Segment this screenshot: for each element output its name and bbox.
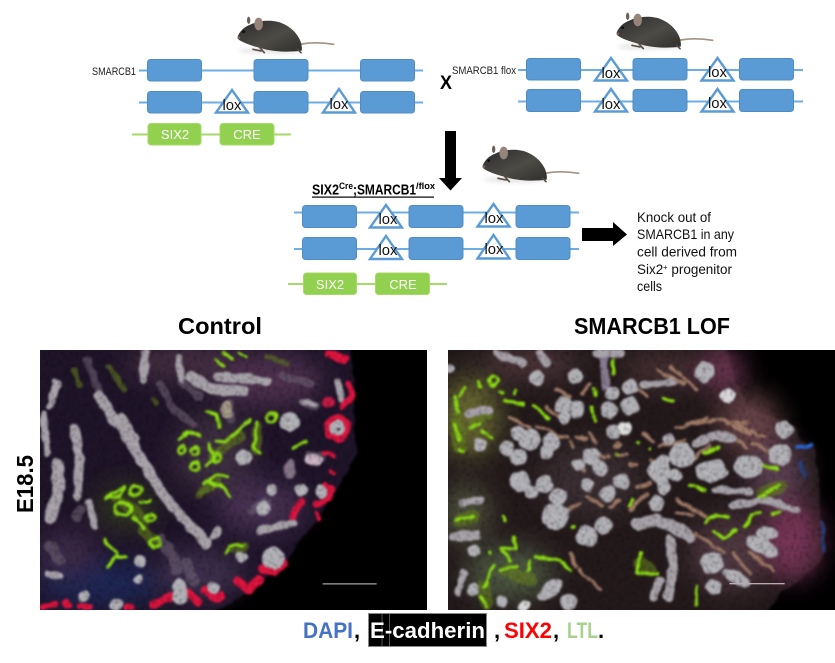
- row label: E18.5: E18.5: [12, 455, 38, 513]
- allele: floxed SMARCB1, right parent top: [518, 58, 803, 82]
- text block: outcome: Knock out of: [637, 209, 711, 225]
- legend: stain colours: LTL: [567, 618, 598, 643]
- scale bar: [323, 583, 377, 585]
- legend: stain colours: [303, 614, 604, 646]
- allele: floxed SMARCB1, left parent: [139, 89, 423, 114]
- allele: floxed SMARCB1, offspring top: [294, 204, 579, 228]
- transgene: SIX2-CRE, left parent: SIX2: [161, 127, 189, 142]
- text block: outcome: progenitor: [668, 261, 732, 277]
- allele: floxed SMARCB1, offspring bottom: lox: [484, 241, 504, 258]
- allele: floxed SMARCB1, offspring top: lox: [378, 211, 398, 228]
- allele: floxed SMARCB1, offspring top: lox: [484, 210, 504, 227]
- allele: floxed SMARCB1, right parent bottom: [518, 89, 803, 113]
- green tubules: [105, 353, 305, 567]
- micrograph: SMARCB1 LOF kidney section: [448, 350, 835, 610]
- legend: stain colours: DAPI: [303, 618, 353, 643]
- cross symbol: X: [440, 73, 452, 94]
- text block: outcome: SMARCB1 in any: [637, 226, 734, 242]
- legend: stain colours: ,: [354, 618, 360, 643]
- mouse: floxed parent: [617, 13, 713, 50]
- allele: floxed SMARCB1, right parent bottom: lox: [708, 95, 727, 112]
- brown tubule fragments: [510, 367, 773, 590]
- arrow: offspring to outcome: [582, 222, 627, 246]
- mouse: offspring: [483, 146, 579, 183]
- transgene: SIX2-CRE, left parent: CRE: [233, 127, 261, 142]
- legend: stain colours: SIX2: [504, 618, 552, 643]
- legend: stain colours: E-cadherin: [370, 618, 485, 643]
- legend: stain colours: .: [598, 618, 604, 643]
- transgene: SIX2-CRE, offspring: SIX2: [316, 277, 344, 292]
- gene label: SMARCB1 flox: SMARCB1 flox: [452, 65, 516, 77]
- micrograph: control kidney section: [40, 350, 427, 610]
- tissue area: [33, 343, 356, 617]
- allele: floxed SMARCB1, offspring bottom: [294, 235, 579, 260]
- allele: floxed SMARCB1, left parent: lox: [222, 97, 242, 114]
- round glomeruli: [78, 401, 345, 611]
- gene label: SMARCB1: SMARCB1: [92, 66, 136, 78]
- dim tubules: [50, 357, 320, 580]
- green LTL tubules: [453, 360, 780, 607]
- red cap clusters: [42, 353, 353, 608]
- white glomerular clusters: [444, 353, 825, 613]
- allele: floxed SMARCB1, right parent bottom: lox: [602, 96, 621, 113]
- tissue area: [440, 343, 825, 617]
- arrow: cross to offspring: [439, 131, 462, 190]
- genotype heading: /flox: [416, 181, 436, 192]
- striped tubules: [43, 353, 342, 577]
- text block: outcome: cells: [637, 278, 662, 294]
- tissue colour wash: [37, 347, 323, 607]
- allele: floxed SMARCB1, offspring bottom: lox: [378, 242, 398, 259]
- legend: stain colours: ,: [494, 618, 500, 643]
- transgene: SIX2-CRE, offspring: [288, 273, 447, 294]
- legend: stain colours: ,: [553, 618, 559, 643]
- genotype heading: [312, 181, 436, 198]
- tissue colour wash: [440, 350, 820, 600]
- text block: outcome: [637, 209, 737, 294]
- genotype heading: SIX2: [312, 182, 339, 198]
- text block: outcome: cell derived from: [637, 244, 737, 260]
- allele: floxed SMARCB1, right parent top: lox: [602, 65, 621, 82]
- allele: floxed SMARCB1, right parent top: lox: [708, 64, 727, 81]
- transgene: SIX2-CRE, offspring: CRE: [389, 277, 417, 292]
- scale bar: [729, 583, 785, 584]
- mouse: SMARCB1 parent: [238, 17, 334, 54]
- genotype heading: ;SMARCB1: [353, 182, 416, 198]
- text block: outcome: Six2: [637, 261, 664, 277]
- text block: outcome: +: [663, 263, 668, 272]
- genotype heading: Cre: [339, 181, 353, 192]
- allele: floxed SMARCB1, left parent: lox: [330, 96, 349, 113]
- transgene: SIX2-CRE, left parent: [132, 124, 291, 145]
- allele: wild type SMARCB1: [139, 60, 423, 81]
- heading: SMARCB1 LOF: SMARCB1 LOF: [574, 313, 730, 339]
- heading: Control: Control: [178, 313, 262, 339]
